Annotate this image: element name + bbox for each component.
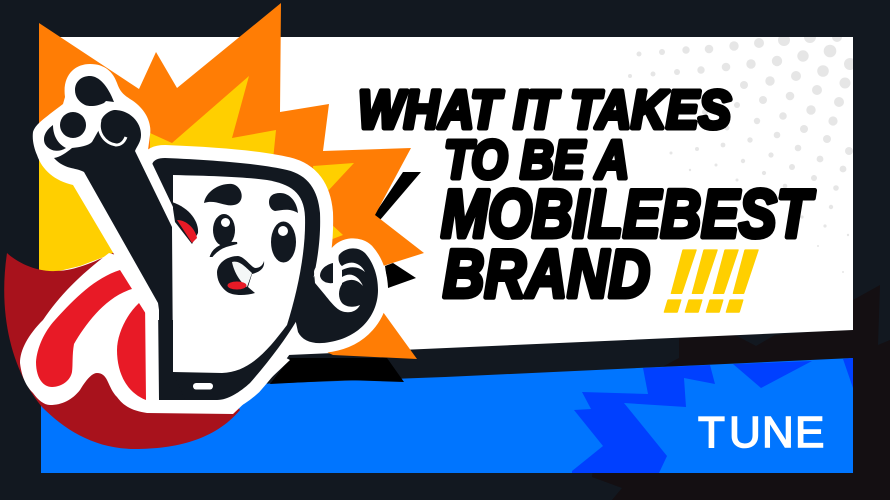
- yellow burst: [39, 76, 354, 272]
- mouth: [217, 256, 264, 295]
- title line 1: WHAT IT TAKES: [358, 80, 731, 140]
- blue band burst: [572, 358, 853, 473]
- fist: crescent: [99, 120, 126, 145]
- title line 4: BRAND: [443, 236, 650, 312]
- title line 3: MOBILEBEST: [441, 176, 816, 252]
- title: [358, 80, 816, 332]
- orange burst: [39, 3, 424, 359]
- eyes: [213, 214, 235, 246]
- right fist thumb: [320, 263, 333, 283]
- raised arm, fist and phone left edge: [54, 110, 185, 400]
- fist: top finger: [75, 76, 114, 106]
- right fist finger lines: [342, 263, 365, 286]
- right arm fill: [295, 248, 378, 343]
- cape: red stripes: [36, 270, 132, 387]
- title line 2: TO BE A: [444, 130, 629, 190]
- right arm outline: [295, 248, 378, 343]
- raised fist: white outline: [33, 64, 173, 320]
- cheek and tongue side: [172, 202, 198, 244]
- logo: TUNE: TUNE: [698, 408, 824, 457]
- phone screen: [173, 175, 305, 373]
- phone body: [152, 158, 320, 400]
- cape: white outline: [20, 253, 290, 414]
- mascot: caped phone character: [4, 64, 378, 449]
- phone home button: [193, 383, 213, 390]
- dark burst behind banner: [592, 285, 890, 500]
- exclamation marks: !!!!: [650, 232, 772, 332]
- black burst shards: [270, 172, 421, 384]
- fist: thumb: [44, 125, 66, 151]
- panel: blue band: [41, 358, 853, 473]
- right fist white palm: [314, 252, 360, 312]
- eyebrows: [204, 184, 242, 205]
- cape: dark red: [4, 247, 240, 449]
- halftone dots: [628, 31, 856, 273]
- fist: ring finger: [60, 112, 86, 138]
- panel: white title area: [41, 37, 853, 366]
